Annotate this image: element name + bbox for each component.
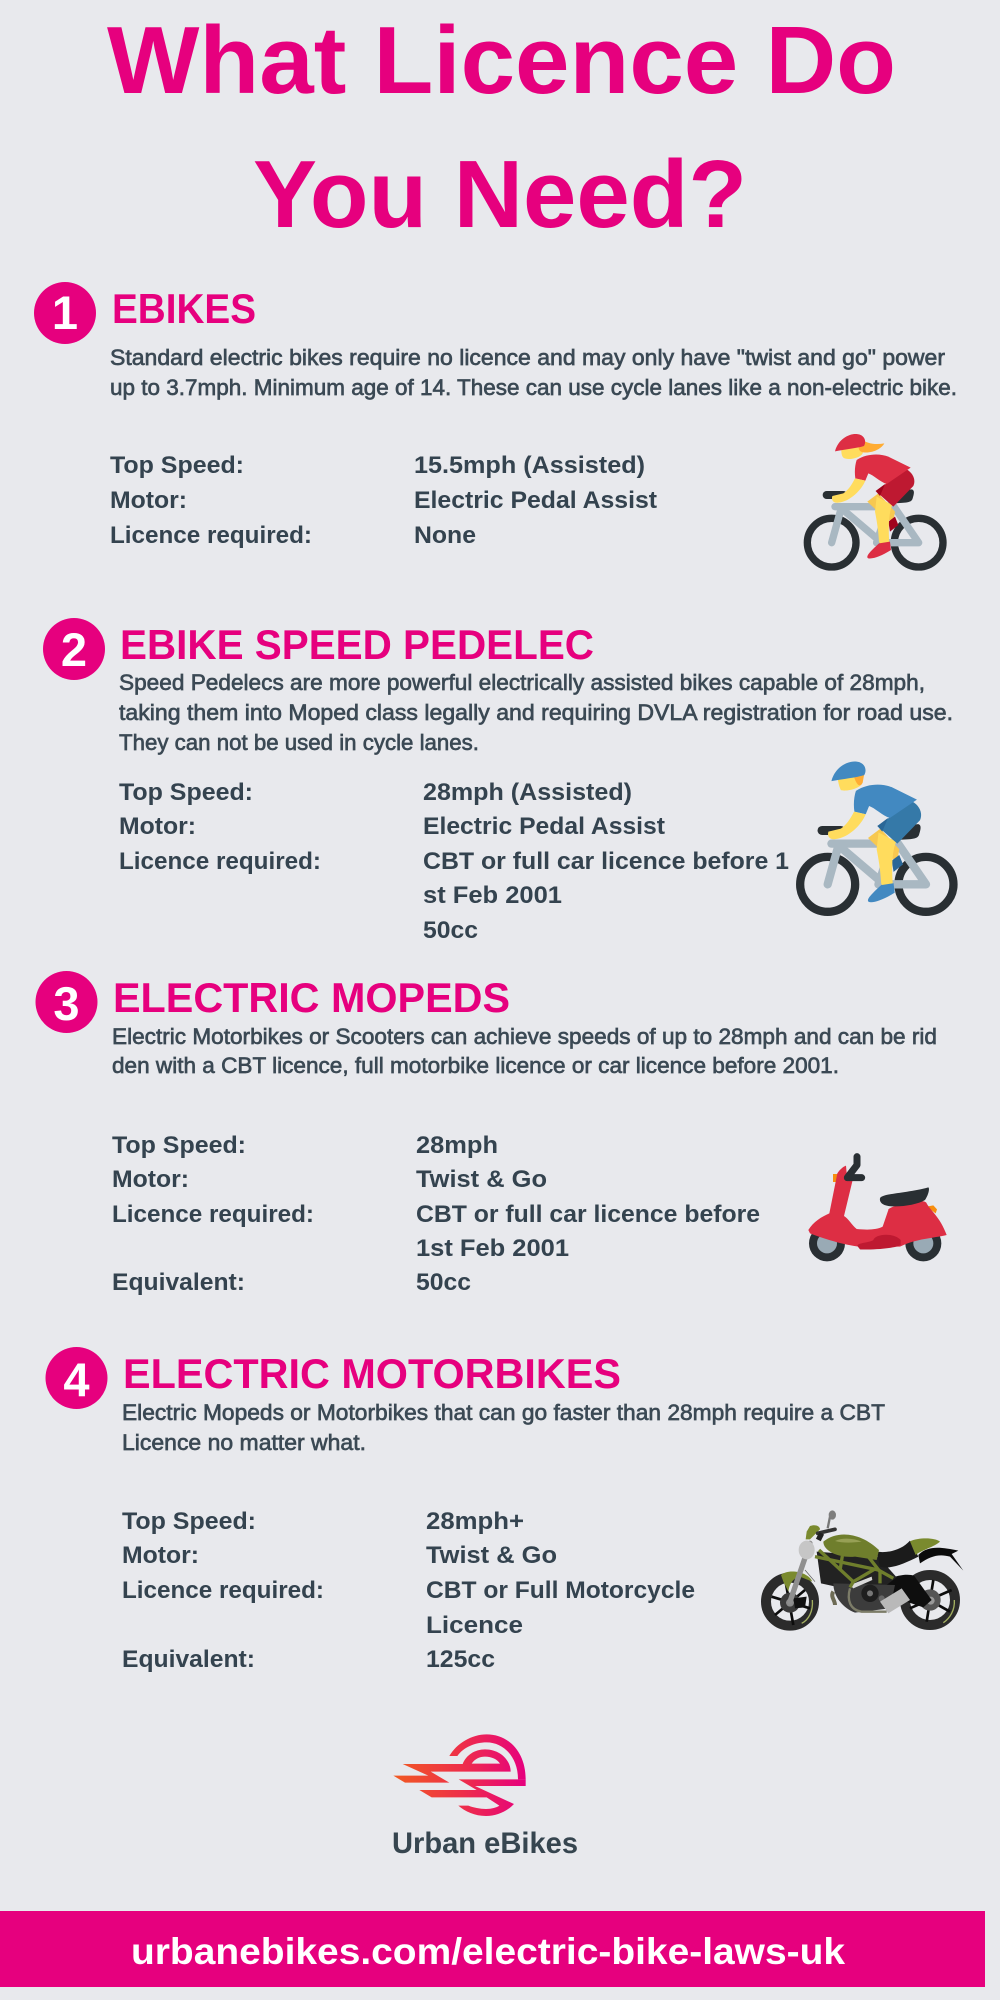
description: speed pedelec <box>119 670 953 755</box>
spec table: ebikes: None <box>414 522 476 549</box>
number badge 3 <box>36 971 98 1033</box>
heading: ebikes: EBIKES <box>112 285 256 332</box>
spec table: electric mopeds: Motor: <box>112 1166 189 1193</box>
spec table: electric motorbikes <box>122 1508 695 1673</box>
number badge 4: 4 <box>63 1353 90 1406</box>
title: You Need? <box>253 141 747 248</box>
spec table: speed pedelec: Top Speed: <box>119 779 253 806</box>
footer url bar <box>0 1911 985 1987</box>
panel: electric mopeds <box>36 971 947 1296</box>
panel: ebikes <box>34 282 957 567</box>
description: electric motorbikes: Electric Mopeds or Motorbikes that can go faster than 28mph require a CBT <box>122 1400 885 1425</box>
panel: electric motorbikes <box>46 1347 963 1673</box>
number badge 1: 1 <box>52 286 78 339</box>
icon: man cyclist <box>800 761 953 912</box>
spec table: electric motorbikes: Twist & Go <box>426 1542 557 1569</box>
spec table: speed pedelec: st Feb 2001 <box>423 882 562 909</box>
spec table: speed pedelec: Motor: <box>119 813 196 840</box>
description: speed pedelec: taking them into Moped class legally and requiring DVLA registration for road use. <box>119 700 953 725</box>
heading: electric motorbikes: ELECTRIC MOTORBIKES <box>123 1350 621 1397</box>
logo mark <box>393 1734 526 1816</box>
description: electric mopeds: Electric Motorbikes or Scooters can achieve speeds of up to 28mph and can be rid <box>112 1024 937 1049</box>
icon: woman cyclist <box>807 434 943 567</box>
spec table: ebikes: Top Speed: <box>110 452 244 479</box>
logo: urban ebikes <box>392 1734 578 1860</box>
spec table: electric mopeds: 28mph <box>416 1132 498 1159</box>
spec table: speed pedelec: 50cc <box>423 917 478 944</box>
spec table: electric motorbikes: Licence required: <box>122 1577 324 1604</box>
description: ebikes: up to 3.7mph. Minimum age of 14. These can use cycle lanes like a non-electric bike. <box>110 375 957 400</box>
number badge 4 <box>46 1347 108 1409</box>
number badge 1 <box>34 282 96 344</box>
spec table: ebikes <box>110 452 657 549</box>
spec table: electric motorbikes: 28mph+ <box>426 1508 524 1535</box>
icon: scooter <box>808 1157 947 1261</box>
spec table: electric motorbikes: CBT or Full Motorcycle <box>426 1577 695 1604</box>
spec table: ebikes: 15.5mph (Assisted) <box>414 452 645 479</box>
spec table: electric mopeds: 1st Feb 2001 <box>416 1235 569 1262</box>
spec table: electric mopeds: Twist & Go <box>416 1166 547 1193</box>
spec table: electric mopeds <box>112 1132 760 1296</box>
description: speed pedelec: Speed Pedelecs are more powerful electrically assisted bikes capable of 28mph, <box>119 670 925 695</box>
heading: electric mopeds: ELECTRIC MOPEDS <box>113 974 510 1021</box>
spec table: ebikes: Motor: <box>110 487 187 514</box>
spec table: electric mopeds: CBT or full car licence before <box>416 1201 760 1228</box>
footer url bar: urbanebikes.com/electric-bike-laws-uk <box>131 1931 845 1972</box>
spec table: electric mopeds: Top Speed: <box>112 1132 246 1159</box>
description: electric mopeds <box>112 1024 937 1078</box>
spec table: electric motorbikes: Top Speed: <box>122 1508 256 1535</box>
spec table: electric motorbikes: Motor: <box>122 1542 199 1569</box>
icon: motorbike <box>766 1510 963 1626</box>
spec table: electric mopeds: Licence required: <box>112 1201 314 1228</box>
panel: ebike speed pedelec <box>43 618 953 944</box>
spec table: electric mopeds: 50cc <box>416 1269 471 1296</box>
title: What Licence Do <box>107 7 896 114</box>
spec table: speed pedelec <box>119 779 789 944</box>
number badge 2 <box>43 618 105 680</box>
spec table: speed pedelec: 28mph (Assisted) <box>423 779 632 806</box>
spec table: speed pedelec: Electric Pedal Assist <box>423 813 665 840</box>
description: speed pedelec: They can not be used in cycle lanes. <box>119 730 479 755</box>
number badge 2: 2 <box>61 623 87 676</box>
title <box>107 7 896 248</box>
number badge 3: 3 <box>53 977 80 1030</box>
description: ebikes: Standard electric bikes require no licence and may only have "twist and go" power <box>110 345 945 370</box>
description: electric motorbikes: Licence no matter what. <box>122 1430 366 1455</box>
heading: ebike speed pedelec: EBIKE SPEED PEDELEC <box>120 621 594 668</box>
spec table: electric motorbikes: Licence <box>426 1612 523 1639</box>
spec table: ebikes: Licence required: <box>110 522 312 549</box>
spec table: electric motorbikes: Equivalent: <box>122 1646 255 1673</box>
spec table: electric motorbikes: 125cc <box>426 1646 495 1673</box>
description: ebikes <box>110 345 957 400</box>
description: electric motorbikes <box>122 1400 885 1455</box>
description: electric mopeds: den with a CBT licence, full motorbike licence or car licence before 2001. <box>112 1053 839 1078</box>
spec table: ebikes: Electric Pedal Assist <box>414 487 657 514</box>
logo wordmark: Urban eBikes <box>392 1827 578 1860</box>
spec table: electric mopeds: Equivalent: <box>112 1269 245 1296</box>
spec table: speed pedelec: Licence required: <box>119 848 321 875</box>
spec table: speed pedelec: CBT or full car licence before 1 <box>423 848 789 875</box>
